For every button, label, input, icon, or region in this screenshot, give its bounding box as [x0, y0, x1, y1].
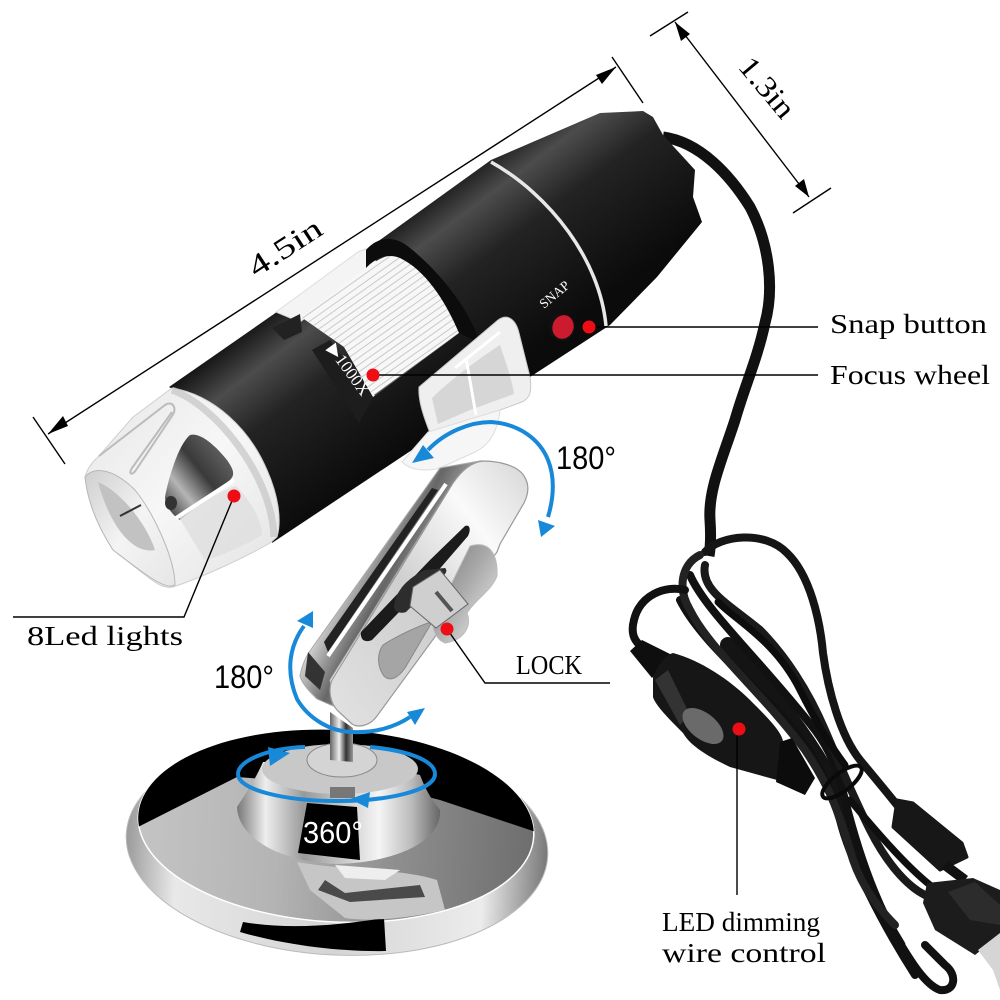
- blue arrow: lower 180: [290, 611, 425, 732]
- collar: [307, 743, 377, 777]
- magnification scale patch: [312, 340, 373, 423]
- label: 4.5in: 4.5in: [242, 212, 329, 284]
- black reflection on rim: [240, 918, 386, 951]
- black body: [169, 111, 702, 543]
- metal connector: [978, 933, 1000, 990]
- dimension: length: [33, 57, 643, 464]
- usb plug: [893, 800, 1000, 990]
- lower slot oval: [379, 622, 432, 679]
- arm plate: [330, 461, 528, 726]
- chrome under dome: [297, 862, 445, 920]
- cable bundle: [633, 537, 953, 990]
- label: 1.3in: 1.3in: [732, 50, 802, 125]
- strain relief bottom: [776, 738, 815, 795]
- blue arrow: 360 rotation: [238, 747, 435, 808]
- switch housing: [653, 653, 783, 780]
- blue arrow: upper 180: [412, 422, 555, 537]
- housing highlight: [655, 670, 690, 725]
- dimmer wheel: [676, 701, 730, 751]
- silver ring: [491, 162, 606, 326]
- callout: led dimming wire control: LED dimming: [662, 907, 820, 937]
- lock knob collar: [394, 568, 446, 613]
- rear sleeve opening: [366, 239, 480, 343]
- led chamber: [165, 435, 233, 520]
- lens collar: [172, 390, 274, 537]
- red snap button: [549, 313, 575, 341]
- callout: lock: [440, 622, 610, 683]
- callout: focus wheel: [366, 360, 990, 390]
- black patch for 360: [298, 803, 360, 860]
- label 180 upper: 180°: [556, 440, 616, 476]
- dome top: [262, 744, 418, 794]
- dimension: width: [650, 12, 831, 213]
- callout: snap button: [582, 309, 988, 339]
- scale text: ▶1000X: [324, 340, 374, 399]
- callout: led dimming wire control: wire control: [662, 938, 826, 968]
- left loop: [633, 589, 685, 650]
- arm rail: [300, 461, 480, 706]
- clear strip behind focus window: [276, 248, 376, 322]
- base plate rim: [121, 724, 553, 966]
- stem: [330, 712, 353, 762]
- callout: lock: LOCK: [516, 650, 582, 680]
- label 360: 360°: [303, 815, 363, 850]
- label 180 lower: 180°: [214, 659, 274, 695]
- clear holder: [419, 317, 531, 433]
- clear fins: [99, 403, 174, 474]
- callout: led dimming wire control: [662, 722, 826, 968]
- right loop: [705, 537, 897, 805]
- strain relief top: [630, 640, 672, 678]
- callout: 8 led lights: 8Led lights: [27, 621, 183, 651]
- dimmer switch: [630, 640, 815, 795]
- callout: 8 led lights: [13, 490, 240, 651]
- lock knob wing: [433, 545, 497, 643]
- dome: [237, 762, 440, 864]
- callout: focus wheel: Focus wheel: [830, 360, 990, 390]
- lock knob shaft: [410, 570, 468, 628]
- focus wheel window: [302, 256, 459, 397]
- black reflection on base: [138, 730, 534, 832]
- dark slot: [361, 526, 470, 641]
- inner strands: [690, 575, 953, 990]
- ferrite choke: [893, 800, 967, 870]
- lower bundle core: [842, 800, 900, 945]
- clear holder foot: [402, 410, 500, 470]
- microscope head: [85, 111, 702, 587]
- lens opening: [85, 471, 175, 586]
- stand: [121, 461, 553, 966]
- base plate top: [133, 720, 539, 932]
- small scale mark: [272, 314, 302, 340]
- dense bundle core: [728, 645, 838, 795]
- clear lens cap: [85, 388, 279, 587]
- strand to plug: [945, 865, 965, 880]
- plug housing: [923, 878, 1000, 955]
- callout: snap button: Snap button: [830, 309, 988, 339]
- cable from microscope to switch: [663, 137, 770, 556]
- snap label: SNAP: [536, 278, 572, 311]
- retaining ring: [818, 760, 866, 804]
